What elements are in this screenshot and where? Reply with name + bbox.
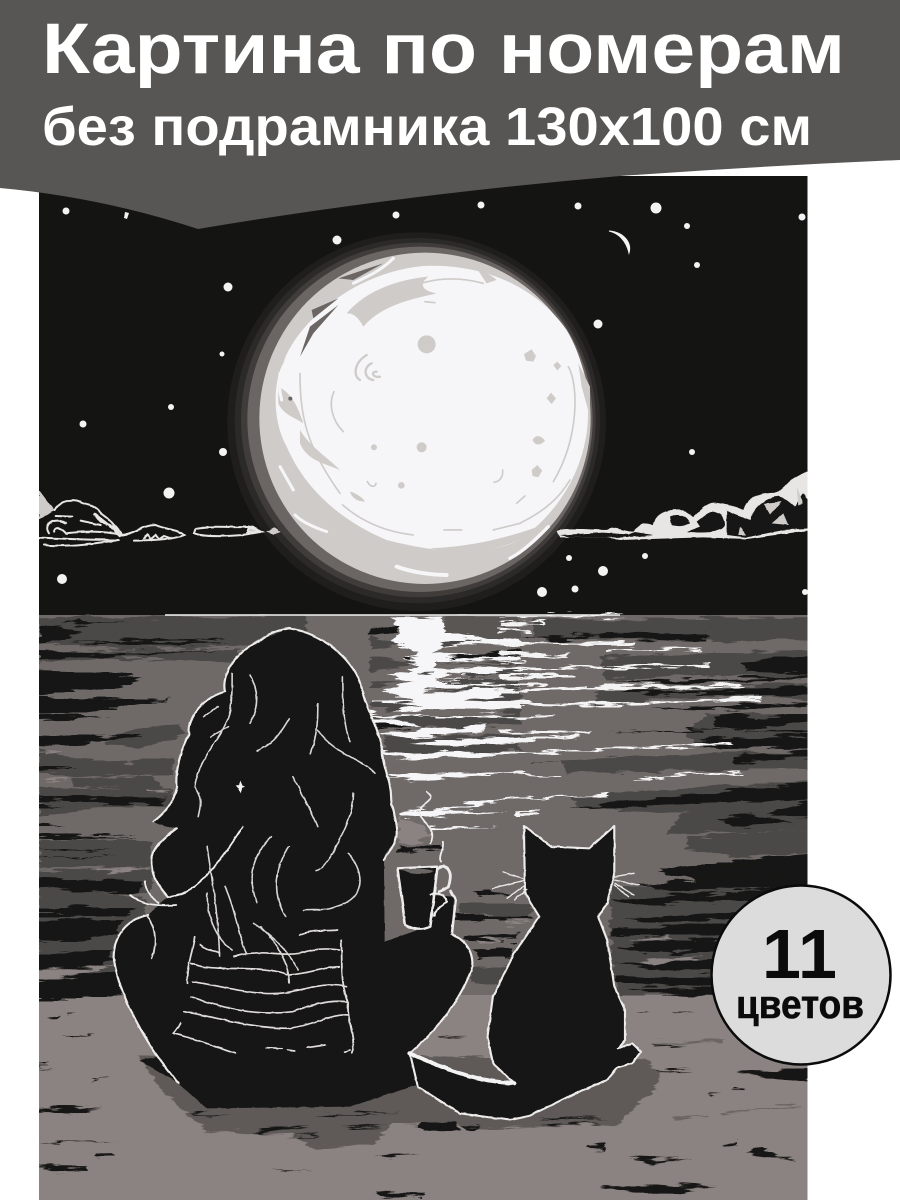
cat silhouette [410,826,641,1120]
clouds [39,471,808,546]
icon: crescent [609,231,630,253]
moon bright face [276,266,588,551]
sea brush streaks [34,615,817,1198]
striped top lines [146,915,353,1053]
moon disc [259,253,591,584]
moon white streaks on rim [279,258,548,575]
cat whiskers [492,872,639,900]
moon glow [227,232,606,611]
girl with coffee [114,628,472,1108]
clouds right [557,471,808,540]
painting: moon, sea, girl and cat [34,176,817,1200]
badge: 11 colours [712,886,890,1064]
sea between girl and cat, and lower right [453,860,817,1000]
hair flicks [130,827,243,905]
badge label: цветов [736,983,864,1027]
horizon highlight [165,614,620,616]
star hair clip [236,781,245,793]
figures [114,628,641,1120]
night sky [39,176,808,616]
title: Картина по номерам [42,10,845,89]
coffee cup [397,866,456,935]
stars [57,202,808,597]
beach shadow and sand marks [34,1011,809,1198]
header banner [0,0,900,229]
badge number: 11 [762,915,837,993]
subtitle: без подрамника 130х100 см [42,97,812,157]
girl ground shadow [140,1054,416,1109]
white water streaks right [500,616,760,813]
sand base [39,995,808,1200]
clouds left [39,490,281,546]
moon craters [371,335,561,489]
girl outline [114,628,472,1083]
girl silhouette fill [114,628,472,1087]
sea left side streaks [36,617,306,999]
cat [410,826,641,1120]
coffee steam [419,792,443,862]
cat tail highlight [410,1053,514,1083]
moon shaded brush strokes [278,268,590,555]
moon light reflection on water [370,615,520,853]
sea base [39,615,808,1010]
sea right side streaks [520,617,813,883]
hair lines [195,673,375,983]
moon [227,232,606,611]
